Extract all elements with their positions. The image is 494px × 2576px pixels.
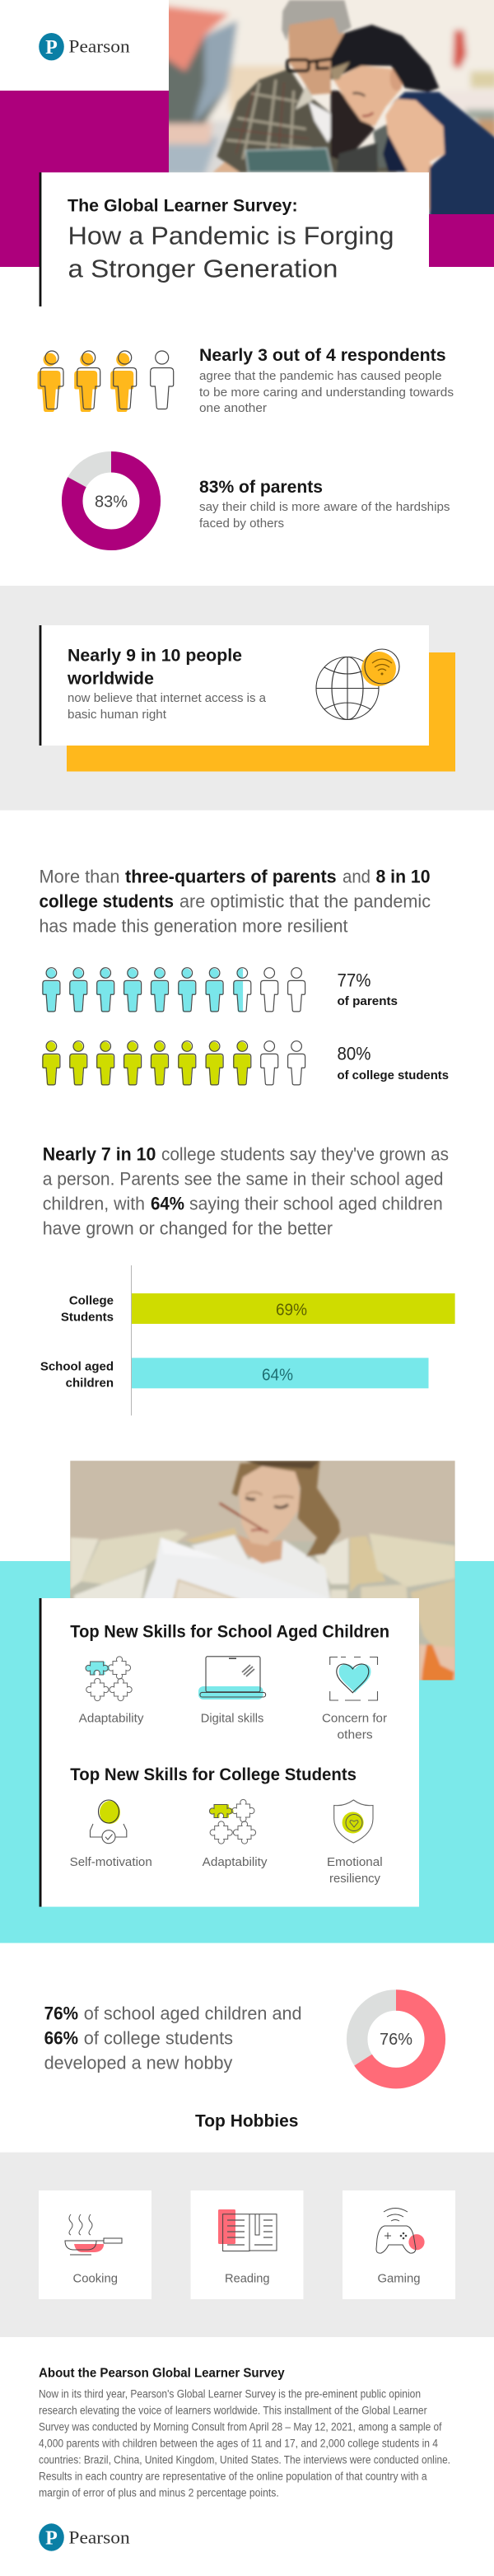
text: nearly 3 out of 4 [199, 346, 454, 415]
axis labels: School aged [40, 1359, 114, 1373]
text: new hobby statement: 76% [44, 2003, 78, 2024]
donut chart: 76%: 76% [380, 2031, 412, 2049]
card: reading: Reading [225, 2273, 270, 2286]
card: top new skills [40, 1598, 419, 1907]
title light lines: How a Pandemic is Forging [68, 222, 394, 250]
icon: laptop [198, 1657, 266, 1699]
labels: college skills [70, 1856, 383, 1886]
internet access text: worldwide [67, 669, 154, 689]
text: new hobby statement [44, 2003, 302, 2073]
text: optimism statement: 8 in 10 [375, 867, 430, 887]
pictogram: 80% of college students [42, 1041, 305, 1086]
label: 80% of college students [338, 1044, 449, 1082]
pictogram: 3 of 4 people [38, 351, 174, 412]
yellow offset block [67, 652, 455, 771]
labels: school aged skills: Concern for [322, 1713, 387, 1726]
logo: Pearson header [39, 33, 130, 60]
logo: Pearson header: Pearson [68, 35, 130, 56]
text: optimism statement: are optimistic that the pandemic [179, 891, 431, 912]
text: optimism statement: and [343, 867, 370, 887]
text: new hobby statement: of college students [84, 2028, 233, 2049]
text: growth statement: college students say they've grown as [161, 1143, 449, 1164]
icon: self-motivation [91, 1800, 127, 1844]
labels: college skills: Emotional [327, 1856, 383, 1869]
bar: school aged children 64% [132, 1358, 428, 1388]
pictogram: 77% of parents [42, 968, 305, 1012]
text: optimism statement: three-quarters of parents [125, 867, 337, 887]
text: 83% of parents: faced by others [199, 517, 284, 531]
text: nearly 3 out of 4: to be more caring and understanding towards [199, 386, 454, 400]
text: about the survey: Results in each country are representative of the online population of that country with a [39, 2471, 427, 2483]
card: reading [191, 2190, 303, 2299]
card: cooking [39, 2190, 151, 2299]
text: growth statement: saying their school aged children [189, 1193, 443, 1213]
text: growth statement: children, with [43, 1193, 145, 1213]
panel: cyan skills background [0, 1561, 494, 1943]
title card [40, 172, 429, 306]
text: new hobby statement: of school aged children and [84, 2003, 302, 2024]
text: optimism statement: college students [40, 891, 174, 912]
photo: young woman painting on a canvas [70, 1461, 455, 1683]
heading: skills for college students: Top New Skills for College Students [70, 1765, 357, 1784]
bar: college students 69% [132, 1293, 455, 1324]
internet access text [67, 647, 267, 722]
card: gaming [343, 2190, 455, 2299]
icon: globe with wifi [316, 649, 399, 720]
internet access text: now believe that internet access is a [68, 691, 267, 705]
heading: skills for school aged children: Top New Skills for School Aged Children [70, 1622, 389, 1641]
icon: open book [218, 2209, 277, 2251]
axis labels [40, 1293, 114, 1390]
text: nearly 3 out of 4: one another [199, 401, 267, 415]
donut chart: 83% [72, 462, 150, 540]
text: about the survey: research elevating the voice of learners worldwide. This installment of the Global Learner [39, 2405, 427, 2417]
header magenta band [0, 91, 494, 267]
card: gaming: Gaming [377, 2273, 420, 2286]
text: growth statement: 64% [151, 1193, 184, 1213]
title bold line: The Global Learner Survey: [68, 197, 298, 216]
labels: college skills: resiliency [329, 1872, 381, 1886]
icon: puzzle lime [209, 1799, 256, 1844]
text: about the survey [39, 2388, 450, 2499]
title light lines: a Stronger Generation [68, 255, 338, 283]
text: new hobby statement: developed a new hobby [44, 2053, 232, 2073]
text: growth statement: Nearly 7 in 10 [43, 1143, 156, 1164]
logo: Pearson footer [39, 2523, 130, 2551]
text: optimism statement [40, 867, 431, 937]
text: about the survey: Survey was conducted by Morning Consult from April 28 – May 12, 2021, among a sample of [39, 2421, 442, 2433]
text: 83% of parents: say their child is more aware of the hardships [199, 500, 450, 514]
label: 80% of college students: 80% [338, 1044, 370, 1064]
text: new hobby statement: 66% [44, 2028, 78, 2049]
labels: school aged skills: Digital skills [201, 1713, 263, 1726]
logo: Pearson footer: Pearson [68, 2527, 130, 2547]
labels: college skills: Self-motivation [70, 1856, 152, 1869]
labels: school aged skills: others [338, 1729, 373, 1742]
text: about the survey: countries: Brazil, China, United Kingdom, United States. The interviews were conducted online. [39, 2454, 450, 2466]
internet access text: Nearly 9 in 10 people [68, 647, 242, 666]
text: about the survey: margin of error of plus and minus 2 percentage points. [39, 2487, 279, 2499]
text: nearly 3 out of 4: Nearly 3 out of 4 respondents [199, 346, 446, 365]
icon: game controller [376, 2208, 425, 2253]
labels: school aged skills [79, 1713, 387, 1742]
text: optimism statement: More than [40, 867, 120, 887]
bar: school aged children 64%: 64% [262, 1367, 293, 1385]
bar chart: grown as a person [40, 1265, 455, 1415]
photo: father and daughter looking at a tablet [161, 0, 494, 225]
axis labels: children [66, 1376, 114, 1390]
bar: college students 69%: 69% [276, 1302, 307, 1320]
icon: heart in frame [330, 1657, 377, 1700]
text: about the survey: Now in its third year, Pearson's Global Learner Survey is the pre-eminent public opinion [39, 2388, 421, 2401]
logo: Pearson header: P [45, 37, 58, 58]
labels: college skills: Adaptability [203, 1856, 268, 1869]
internet access text: basic human right [68, 708, 167, 722]
label: 77% of parents: of parents [338, 994, 398, 1008]
card: cooking: Cooking [72, 2273, 118, 2286]
text: 83% of parents: 83% of parents [199, 478, 323, 497]
axis labels: College [69, 1293, 114, 1307]
text: optimism statement: has made this generation more resilient [40, 916, 347, 937]
text: nearly 3 out of 4: agree that the pandemic has caused people [199, 369, 441, 383]
donut chart: 76% [357, 2000, 435, 2078]
axis labels: Students [61, 1310, 114, 1324]
icon: puzzle cyan [86, 1657, 132, 1701]
icon: shield with heart [334, 1800, 373, 1843]
heading: about the survey: About the Pearson Global Learner Survey [39, 2367, 285, 2381]
heading: top hobbies: Top Hobbies [195, 2112, 298, 2131]
logo: Pearson footer: P [45, 2527, 58, 2549]
text: growth statement [43, 1143, 449, 1238]
label: 77% of parents: 77% [338, 970, 370, 990]
labels: school aged skills: Adaptability [79, 1713, 144, 1726]
panel: internet access [0, 586, 494, 811]
title light lines [68, 222, 394, 283]
text: 83% of parents [199, 478, 450, 531]
panel: top hobbies [0, 2153, 494, 2337]
label: 77% of parents [338, 970, 398, 1008]
label: 80% of college students: of college students [338, 1068, 449, 1082]
text: growth statement: have grown or changed for the better [43, 1218, 333, 1238]
text: about the survey: 4,000 parents with children between the ages of 11 and 17, and 2,000 college students in 4 [39, 2438, 438, 2450]
text: growth statement: a person. Parents see the same in their school aged [43, 1168, 443, 1189]
donut chart: 83%: 83% [95, 493, 128, 511]
icon: frying pan [65, 2214, 122, 2255]
